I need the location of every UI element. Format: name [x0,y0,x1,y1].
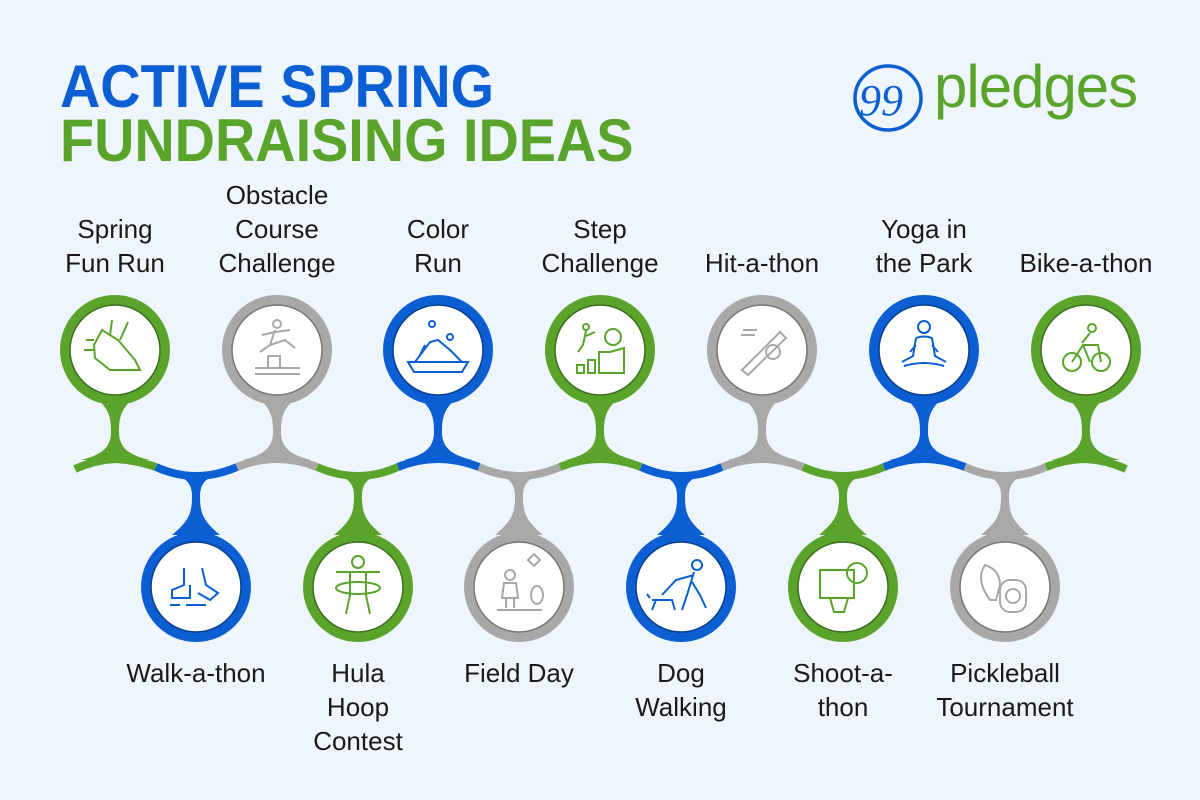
node: Hit-a-thon [707,295,817,460]
node: Spring Fun Run [60,295,170,460]
logo [853,53,1137,132]
label: Step Challenge [541,214,659,278]
label: Obstacle Course Challenge: Obstacle [226,180,328,210]
label: Obstacle Course Challenge [218,180,336,278]
label: Pickleball Tournament [936,658,1074,722]
label: Shoot-a-thon [793,658,893,722]
label: Pickleball Tournament: Pickleball [950,658,1060,688]
logo text: pledges [934,53,1137,120]
node: Shoot-a-thon [788,472,898,642]
label: Step Challenge: Challenge [541,248,659,278]
label: Dog Walking: Walking [635,692,727,722]
node: Dog Walking [626,472,736,642]
label: Pickleball Tournament: Tournament [936,692,1074,722]
label: Yoga in the Park: the Park [876,248,972,278]
logo mark: 99 [859,76,903,125]
node: Step Challenge [545,295,655,460]
label: Hula Hoop Contest [313,658,403,756]
label: Bike-a-thon: Bike-a-thon [1020,248,1152,278]
node: Walk-a-thon [141,472,251,642]
label: Spring Fun Run [65,214,165,278]
label: Dog Walking [635,658,727,722]
title [60,53,634,174]
label: Obstacle Course Challenge: Course [235,214,319,244]
node: Obstacle Course Challenge [222,295,332,460]
wave segments [75,459,1126,476]
label: Field Day: Field Day [464,658,574,688]
title line 2: FUNDRAISING IDEAS [60,107,634,174]
label: Hit-a-thon: Hit-a-thon [705,248,819,278]
label: Color Run [407,214,469,278]
label: Spring Fun Run: Fun Run [65,248,165,278]
node: Bike-a-thon [1031,295,1141,460]
label: Color Run: Run [414,248,462,278]
node: Field Day [464,472,574,642]
node: Pickleball Tournament [950,472,1060,642]
label: Yoga in the Park [876,214,972,278]
label: Hula Hoop Contest: Contest [313,726,403,756]
label: Color Run: Color [407,214,469,244]
label: Hula Hoop Contest: Hula [331,658,385,688]
label: Walk-a-thon: Walk-a-thon [126,658,266,688]
node: Hula Hoop Contest [303,472,413,642]
label: Obstacle Course Challenge: Challenge [218,248,336,278]
node: Color Run [383,295,493,460]
title line 1: ACTIVE SPRING [60,53,494,120]
label: Hula Hoop Contest: Hoop [327,692,389,722]
label: Yoga in the Park: Yoga in [881,214,967,244]
logo mark [853,64,923,132]
label: Spring Fun Run: Spring [77,214,153,244]
label: Shoot-a-thon: thon [818,692,868,722]
label: Shoot-a-thon: Shoot-a- [793,658,893,688]
label: Dog Walking: Dog [657,658,705,688]
node: Yoga in the Park [869,295,979,460]
label: Step Challenge: Step [573,214,627,244]
